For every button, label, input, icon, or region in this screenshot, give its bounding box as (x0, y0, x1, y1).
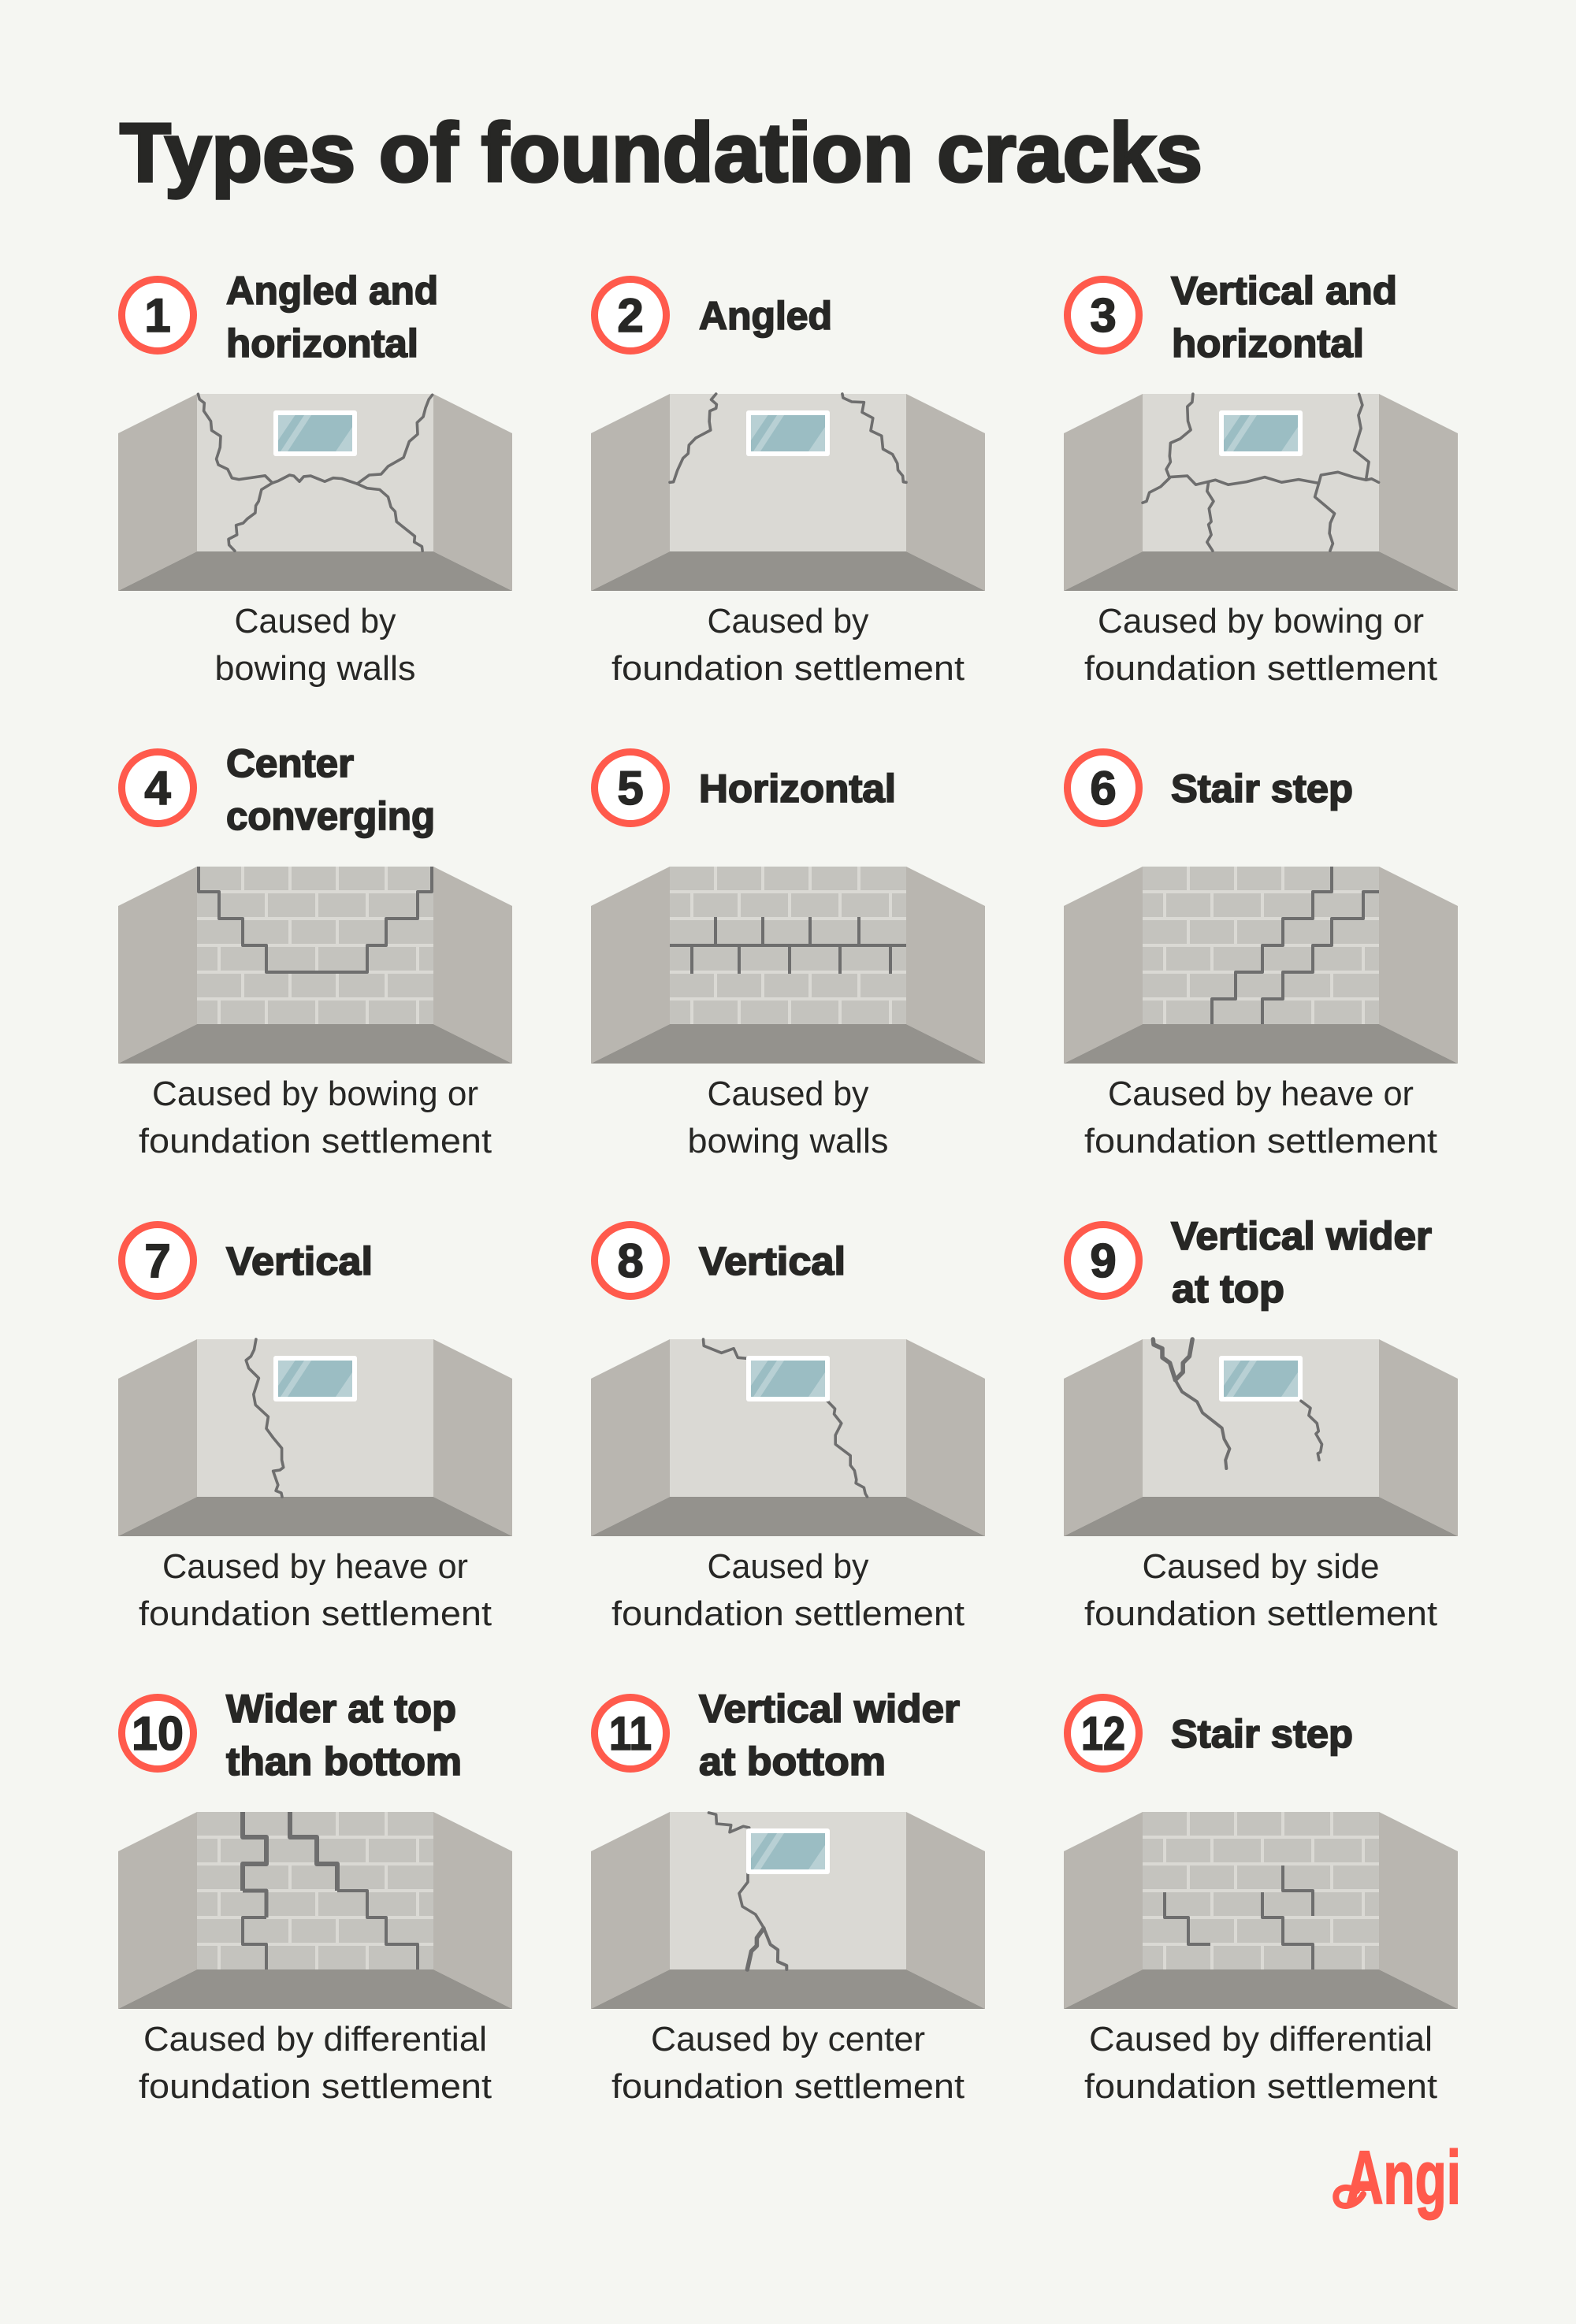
illustration: room with cracks (591, 394, 985, 591)
caption (611, 1547, 965, 1633)
heading (1171, 269, 1397, 366)
number badge 10: 10 (132, 1707, 184, 1760)
heading (226, 741, 435, 838)
number badge 7: 7 (144, 1234, 171, 1287)
number badge 10 (121, 1697, 194, 1769)
caption: Caused by heave or (1108, 1075, 1414, 1113)
heading: converging (226, 794, 435, 838)
number badge 2: 2 (617, 289, 644, 342)
number badge 4 (121, 752, 194, 824)
caption: foundation settlement (139, 1122, 492, 1160)
illustration: brick room with cracks (1064, 867, 1458, 1064)
number badge 4: 4 (144, 762, 171, 815)
number badge 6: 6 (1090, 762, 1117, 815)
number badge 3 (1067, 279, 1139, 351)
title: Types of foundation cracks (120, 106, 1202, 199)
illustration: brick room with cracks (591, 867, 985, 1064)
panel: 1 angled and horizontal (118, 269, 512, 688)
panel: 6 stair step (1064, 752, 1458, 1160)
caption (139, 1547, 492, 1633)
caption: foundation settlement (1084, 2067, 1437, 2106)
heading: Angled and (226, 269, 438, 313)
number badge 5 (594, 752, 667, 824)
number badge 12: 12 (1081, 1707, 1125, 1760)
caption: Caused by bowing or (1098, 602, 1424, 640)
logo: Angi: Angi (1346, 2136, 1461, 2220)
illustration: room with cracks (591, 1812, 985, 2009)
heading: Vertical wider (699, 1687, 960, 1731)
heading: Center (226, 741, 354, 785)
caption (1084, 2020, 1437, 2106)
panel: 8 vertical (591, 1224, 985, 1633)
illustration: room with cracks (118, 394, 512, 591)
heading: Vertical (699, 1239, 846, 1283)
number badge 11 (594, 1697, 667, 1769)
heading: horizontal (1172, 321, 1364, 366)
illustration: brick room with cracks (118, 1812, 512, 2009)
heading: Horizontal (699, 767, 896, 811)
panel: 7 vertical (118, 1224, 512, 1633)
heading: Vertical (226, 1239, 373, 1283)
number badge 11: 11 (609, 1707, 652, 1760)
number badge 9: 9 (1090, 1234, 1117, 1287)
caption (611, 602, 965, 688)
number badge 7 (121, 1224, 194, 1297)
number badge 1: 1 (144, 289, 171, 342)
heading (226, 269, 438, 366)
caption: foundation settlement (611, 1595, 965, 1633)
caption: Caused by differential (143, 2020, 487, 2059)
number badge 5: 5 (617, 762, 644, 815)
heading: Vertical wider (1171, 1214, 1432, 1258)
caption (139, 1075, 492, 1160)
number badge 6 (1067, 752, 1139, 824)
number badge 3: 3 (1090, 289, 1117, 342)
caption: Caused by heave or (162, 1547, 468, 1586)
heading: Stair step (1171, 767, 1353, 811)
panel: 9 vertical wider at top (1064, 1214, 1458, 1633)
caption (1084, 1075, 1437, 1160)
caption: Caused by bowing or (152, 1075, 478, 1113)
panel: 11 vertical wider at bottom (591, 1687, 985, 2106)
caption: Caused by (708, 1075, 868, 1113)
panel: 5 horizontal (591, 752, 985, 1160)
number badge 12 (1067, 1697, 1139, 1769)
heading (699, 1687, 960, 1784)
heading: horizontal (226, 321, 418, 366)
heading: Vertical and (1171, 269, 1397, 313)
caption: foundation settlement (1084, 1595, 1437, 1633)
panel: 12 stair step (1064, 1697, 1458, 2106)
illustration: brick room with cracks (1064, 1812, 1458, 2009)
number badge 2 (594, 279, 667, 351)
caption: Caused by (708, 1547, 868, 1586)
caption: foundation settlement (139, 2067, 492, 2106)
caption (1084, 1547, 1437, 1633)
heading: at top (1172, 1267, 1284, 1311)
heading: Angled (699, 294, 832, 338)
illustration: room with cracks (591, 1339, 985, 1536)
heading: than bottom (226, 1739, 462, 1784)
caption: foundation settlement (611, 649, 965, 688)
illustration: room with cracks (118, 1339, 512, 1536)
caption: foundation settlement (1084, 1122, 1437, 1160)
panel: 3 vertical and horizontal (1064, 269, 1458, 688)
number badge 8: 8 (617, 1234, 644, 1287)
caption: foundation settlement (611, 2067, 965, 2106)
caption (139, 2020, 492, 2106)
heading (226, 1687, 462, 1784)
heading: Wider at top (226, 1687, 456, 1731)
caption: bowing walls (687, 1122, 889, 1160)
caption (687, 1075, 889, 1160)
caption: Caused by differential (1089, 2020, 1433, 2059)
panel: 4 center converging (118, 741, 512, 1160)
caption: Caused by center (651, 2020, 925, 2059)
panel: 2 angled (591, 279, 985, 688)
illustration: room with cracks (1064, 1339, 1458, 1536)
heading: Stair step (1171, 1712, 1353, 1756)
number badge 8 (594, 1224, 667, 1297)
number badge 9 (1067, 1224, 1139, 1297)
caption: foundation settlement (1084, 649, 1437, 688)
heading: at bottom (699, 1739, 886, 1784)
illustration: brick room with cracks (118, 867, 512, 1064)
panel: 10 wider at top than bottom (118, 1687, 512, 2106)
heading (1171, 1214, 1432, 1311)
caption: Caused by (235, 602, 396, 640)
caption: Caused by side (1143, 1547, 1379, 1586)
caption (611, 2020, 965, 2106)
caption: foundation settlement (139, 1595, 492, 1633)
caption: Caused by (708, 602, 868, 640)
illustration: room with cracks (1064, 394, 1458, 591)
number badge 1 (121, 279, 194, 351)
caption (1084, 602, 1437, 688)
logo: Angi (1336, 2136, 1461, 2220)
caption (214, 602, 416, 688)
caption: bowing walls (214, 649, 416, 688)
